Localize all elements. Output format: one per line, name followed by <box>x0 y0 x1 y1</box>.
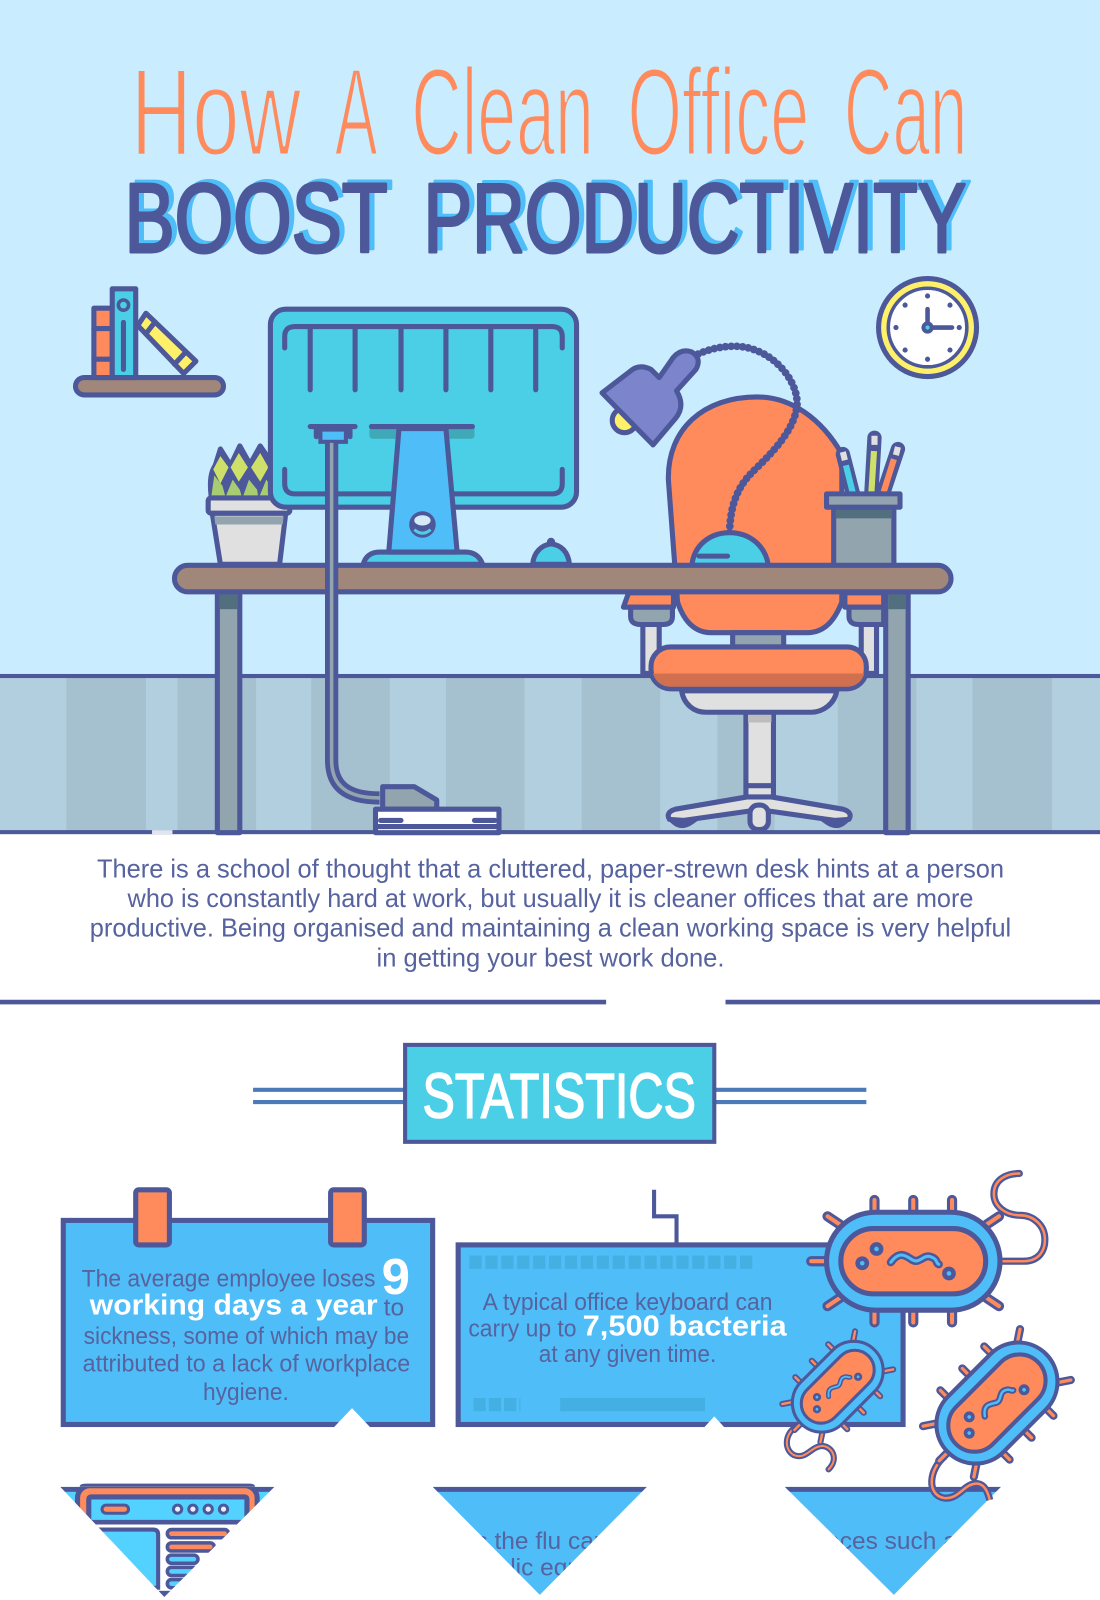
title line: BOOST PRODUCTIVITY <box>124 163 966 273</box>
chair seat under plate <box>682 691 837 712</box>
icon: desk lamp shade <box>602 351 698 445</box>
computer monitor <box>270 309 577 564</box>
card text: hygiene. <box>203 1379 289 1406</box>
title line: How A Clean Office Can: Clean <box>411 43 594 182</box>
intro paragraph: in getting your best work done. <box>377 944 724 972</box>
icon: potted plant <box>208 446 290 564</box>
monitor stand cable hole <box>409 511 436 538</box>
monitor stand <box>389 429 457 552</box>
intro paragraph: There is a school of thought that a cluttered, paper-strewn desk hints at a person <box>97 856 1004 884</box>
icon: pen cup <box>827 436 900 566</box>
keyboard keys <box>469 1262 753 1405</box>
card text: 9 <box>382 1248 410 1305</box>
card notch <box>334 1408 370 1428</box>
title line: How A Clean Office Can: How <box>131 43 302 182</box>
title line: How A Clean Office Can <box>131 43 967 182</box>
card text: at any given time. <box>539 1341 716 1368</box>
desk <box>174 565 951 833</box>
icon: medium bacterium <box>905 1319 1081 1500</box>
icon: lamp cord <box>698 346 797 531</box>
icon: large bacterium <box>811 1173 1045 1322</box>
card text: sickness, some of which may be <box>84 1323 409 1350</box>
monitor base <box>363 552 483 564</box>
panel: keyboard card, bacteria <box>458 1190 903 1428</box>
panel: triangle card, flu <box>432 1486 647 1595</box>
background: sky wall <box>0 0 1100 678</box>
panel: calendar card, sick days <box>63 1190 433 1428</box>
section divider <box>0 1000 1100 1004</box>
card text <box>468 1289 788 1368</box>
icon: small bacterium <box>768 1324 901 1469</box>
icon: bacteria group <box>768 1173 1081 1500</box>
chair <box>623 397 884 830</box>
power cable <box>332 443 380 798</box>
panel: triangle card, places <box>785 1487 1001 1597</box>
card notch <box>704 1416 724 1428</box>
icon: wall clock <box>879 279 977 377</box>
card text: attributed to a lack of workplace <box>83 1350 410 1377</box>
statistics heading: STATISTICS <box>422 1061 696 1131</box>
chair back <box>668 397 842 633</box>
card text: working days a year <box>89 1289 378 1321</box>
icon: lamp base <box>692 533 768 565</box>
title line: How A Clean Office Can: Office <box>628 43 809 182</box>
monitor body <box>270 309 577 507</box>
title line shadow: BOOST <box>130 160 393 270</box>
calendar clips <box>136 1190 364 1245</box>
chair seat cushion <box>651 647 866 689</box>
icon: wall shelf with books <box>76 289 223 395</box>
intro paragraph <box>90 856 1011 972</box>
card text: 7,500 bacteria <box>583 1311 788 1343</box>
desk right leg <box>886 592 908 833</box>
card text: Illness the flu can <box>418 1528 607 1555</box>
intro paragraph: who is constantly hard at work, but usually it is cleaner offices that are more <box>127 885 973 913</box>
intro paragraph: productive. Being organised and maintaining a clean working space is very helpful <box>90 915 1011 943</box>
card text: The average employee loses <box>82 1266 376 1293</box>
panel: triangle card, browser <box>60 1484 274 1597</box>
icon: browser window <box>75 1486 260 1597</box>
title line shadow <box>130 160 971 270</box>
title line: How A Clean Office Can: Can <box>844 43 967 182</box>
chair column and base <box>668 711 850 830</box>
power strip and plug <box>376 787 499 833</box>
icon: desk bell <box>533 538 569 564</box>
chair back connector <box>733 633 784 647</box>
desk top <box>174 565 951 592</box>
card text: public equipment <box>469 1555 655 1582</box>
card text: to <box>384 1294 404 1321</box>
card text: A typical office keyboard can <box>483 1289 772 1316</box>
card text: carry up to <box>468 1316 577 1343</box>
card text <box>82 1248 410 1406</box>
chair arm stems <box>643 624 877 673</box>
title line: BOOST PRODUCTIVITY: BOOST <box>124 163 388 273</box>
card text: places such as <box>807 1528 969 1555</box>
title <box>124 43 971 273</box>
keyboard cord <box>654 1190 677 1245</box>
background: striped wainscot <box>0 674 1100 834</box>
chair armrest pads <box>623 593 884 607</box>
desk left leg <box>217 592 240 833</box>
title line: How A Clean Office Can: A <box>335 43 378 182</box>
monitor port plate <box>310 427 474 442</box>
monitor inner groove and vents <box>285 327 562 494</box>
card text <box>482 1532 598 1576</box>
statistics heading <box>253 1045 866 1142</box>
